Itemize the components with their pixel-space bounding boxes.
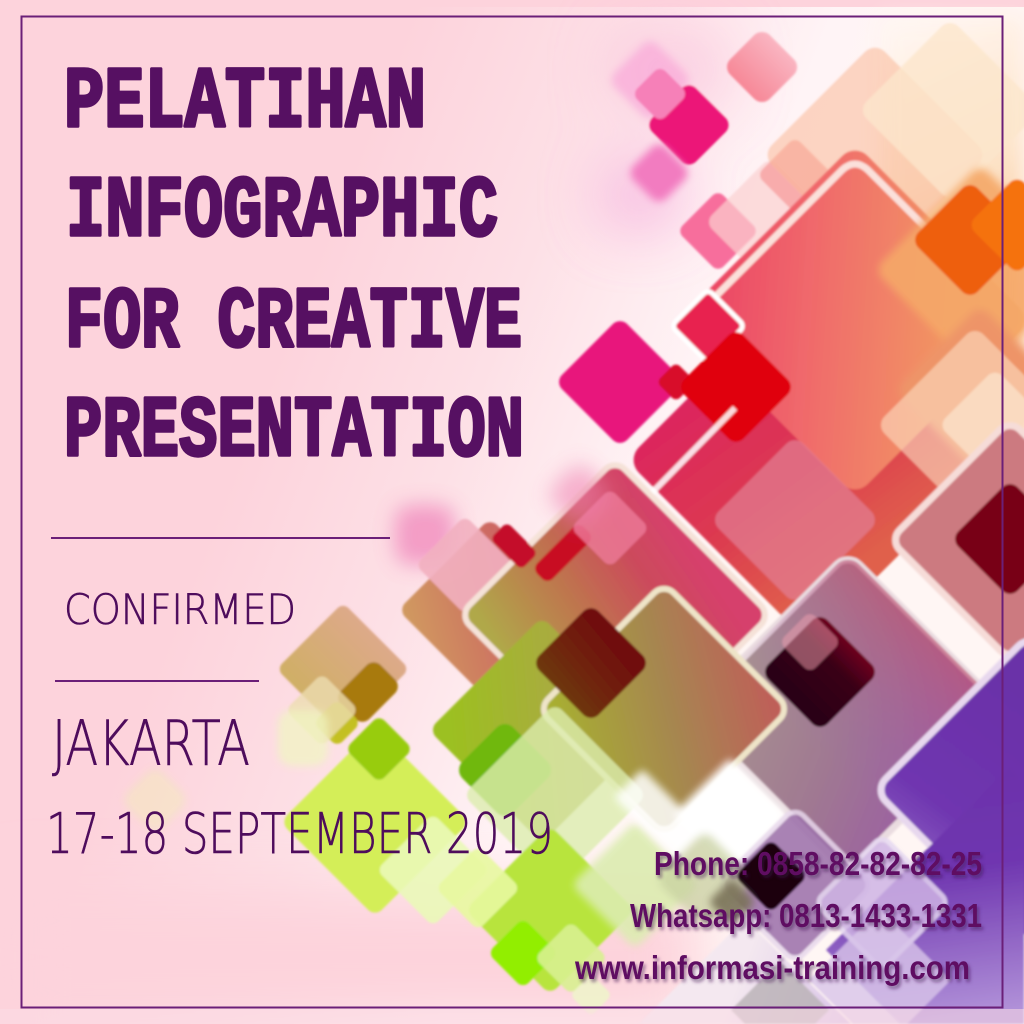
title: [64, 54, 524, 481]
dark red square: [951, 480, 1024, 598]
contact details: [574, 845, 982, 986]
pale pink inner square and blush: [395, 505, 455, 565]
contact details: www.informasi-training.com: [574, 949, 970, 986]
top pink cluster: [608, 27, 835, 287]
divider: [51, 537, 390, 539]
green-olive square: [429, 617, 655, 843]
lime squares: [120, 703, 699, 1016]
peach right wash: [880, 17, 1024, 437]
salmon and cream top-right squares: [762, 18, 1024, 268]
olive square: [538, 583, 790, 835]
city: JAKARTA: [52, 707, 250, 780]
title: INFOGRAPHIC: [66, 163, 498, 261]
small reds: [490, 522, 538, 570]
crimson square: [626, 276, 994, 644]
confirmed label: CONFIRMED: [64, 585, 296, 634]
white patches: [673, 758, 787, 872]
lower lilac squares: [639, 807, 951, 1024]
maroon diamond: [761, 613, 879, 731]
orange extension right: [874, 164, 1024, 376]
dark plum diamond: [532, 604, 650, 722]
orange square outline: [692, 164, 968, 320]
lower-left pink wash: [0, 890, 700, 1024]
orange dark square: [911, 181, 1024, 299]
white crossing line: [640, 408, 735, 505]
bright pink square: [555, 317, 685, 447]
date: 17-18 SEPTEMBER 2019: [46, 802, 553, 867]
magenta slim: [671, 289, 745, 363]
top pink strip: [0, 0, 1024, 7]
right outlined square: [890, 420, 1024, 660]
title: PELATIHAN: [64, 54, 426, 152]
tan square: [277, 603, 409, 735]
title: PRESENTATION: [64, 383, 524, 481]
tan-brown square: [398, 518, 582, 702]
large orange square: [678, 143, 1024, 497]
title: FOR CREATIVE: [65, 274, 522, 372]
red square: [677, 328, 795, 446]
green diamond: [454, 719, 556, 821]
red-brown square: [459, 459, 771, 771]
rosy square: [710, 435, 880, 605]
bottom strip: [0, 1009, 1024, 1024]
pale peach right squares: [876, 326, 1024, 524]
divider: [55, 680, 259, 682]
mauve square: [688, 553, 1008, 873]
purple big square: [874, 634, 1024, 946]
glow halos: [600, 30, 730, 230]
